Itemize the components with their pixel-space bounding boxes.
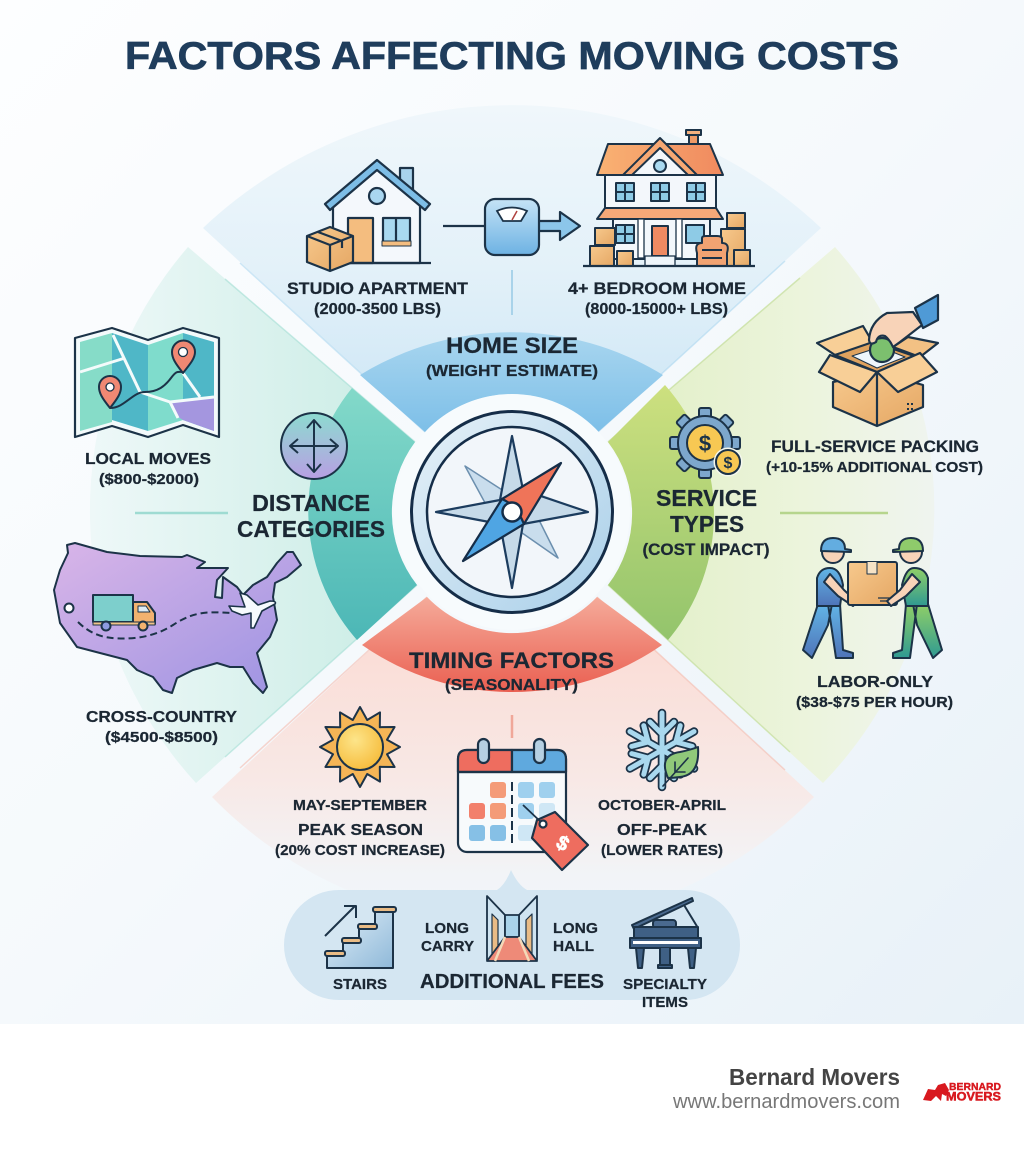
heading: service types: TYPES [670,511,744,537]
label: peak season: MAY-SEPTEMBER [293,797,427,814]
icon: compass needle [463,463,561,561]
icon: gear with dollar coins: $ [699,431,711,456]
label: local moves [85,451,211,488]
compass [394,394,630,630]
label: peak season: PEAK SEASON [298,822,423,839]
icon: calendar with price tag [458,739,588,870]
label: full-service packing [766,437,983,476]
footer: company name and url [672,1064,900,1113]
label: labor-only: LABOR-ONLY [817,674,933,691]
label: cross-country [86,709,237,746]
panel: additional fees [284,870,740,1011]
label: long hall: LONG [553,920,598,937]
icon: stairs [325,906,396,968]
icon: direction circle [281,413,347,479]
panel: distance categories [54,247,417,783]
heading: service types: (COST IMPACT) [642,540,770,559]
label: peak season [275,797,445,859]
heading: home size: HOME SIZE [446,333,578,358]
icon: large house [583,130,755,266]
heading: home size [426,333,598,380]
footer: logo: MOVERS [946,1090,1001,1104]
panel: home size [203,105,821,432]
label: off-peak: OFF-PEAK [617,822,707,839]
icon: gear with dollar coins [670,408,742,478]
heading: service types: SERVICE [656,485,757,511]
heading: service types [642,485,770,559]
title: FACTORS AFFECTING MOVING COSTS [125,35,899,78]
label: peak season: (20% COST INCREASE) [275,842,445,859]
label: local moves: ($800-$2000) [99,471,199,488]
footer: logo: BERNARD [949,1082,1001,1093]
label: cross-country: CROSS-COUNTRY [86,709,237,726]
heading: additional fees: ADDITIONAL FEES [420,971,604,993]
icon: two movers with box [803,538,942,658]
icon: hallway [487,896,537,961]
heading: timing factors: (SEASONALITY) [445,677,578,694]
icon: calendar with price tag: $ [552,832,573,856]
label: specialty items: SPECIALTY [623,976,707,993]
label: long hall: HALL [553,938,594,955]
icon: folded map [75,328,219,437]
panel: service types [608,247,983,783]
heading: distance categories: DISTANCE [252,490,370,516]
label: long carry: CARRY [421,938,474,955]
label: stairs: STAIRS [333,976,387,993]
label: off-peak: (LOWER RATES) [601,842,723,859]
heading: distance categories [237,490,385,542]
label: long carry [421,920,474,955]
icon: grand piano [630,898,701,968]
icon: packing box with hand [817,295,938,426]
label: 4+ bedroom home: (8000-15000+ LBS) [585,301,728,318]
heading: distance categories: CATEGORIES [237,516,385,542]
label: long hall [553,920,598,955]
footer band [0,1024,1024,1154]
icon: usa map with truck and plane [54,543,301,693]
icon: snowflake with leaf [624,713,700,787]
icon: gear with dollar coins: $ [724,455,733,472]
label: studio apartment: (2000-3500 LBS) [314,301,441,318]
heading: timing factors [409,648,614,694]
label: off-peak: OCTOBER-APRIL [598,797,726,814]
footer: company name and url: www.bernardmovers.com [672,1091,900,1113]
label: 4+ bedroom home: 4+ BEDROOM HOME [568,279,746,298]
icon: studio house [307,160,431,271]
label: studio apartment: STUDIO APARTMENT [287,279,469,298]
heading: home size: (WEIGHT ESTIMATE) [426,363,598,380]
footer: company name and url: Bernard Movers [729,1064,900,1090]
label: local moves: LOCAL MOVES [85,451,211,468]
label: cross-country: ($4500-$8500) [105,729,218,746]
label: full-service packing: FULL-SERVICE PACKING [771,437,979,456]
footer: logo [923,1082,1001,1104]
label: 4+ bedroom home [568,279,746,318]
label: labor-only: ($38-$75 PER HOUR) [796,694,953,711]
label: long carry: LONG [425,920,469,937]
label: specialty items: ITEMS [642,994,688,1011]
label: full-service packing: (+10-15% ADDITIONAL COST) [766,459,983,476]
heading: timing factors: TIMING FACTORS [409,648,614,673]
label: specialty items [623,976,707,1011]
icon: scale with arrow [443,199,580,255]
label: studio apartment [287,279,469,318]
icon: sun [320,707,400,787]
label: labor-only [796,674,953,711]
panel: timing factors [212,597,814,924]
label: off-peak [598,797,726,859]
